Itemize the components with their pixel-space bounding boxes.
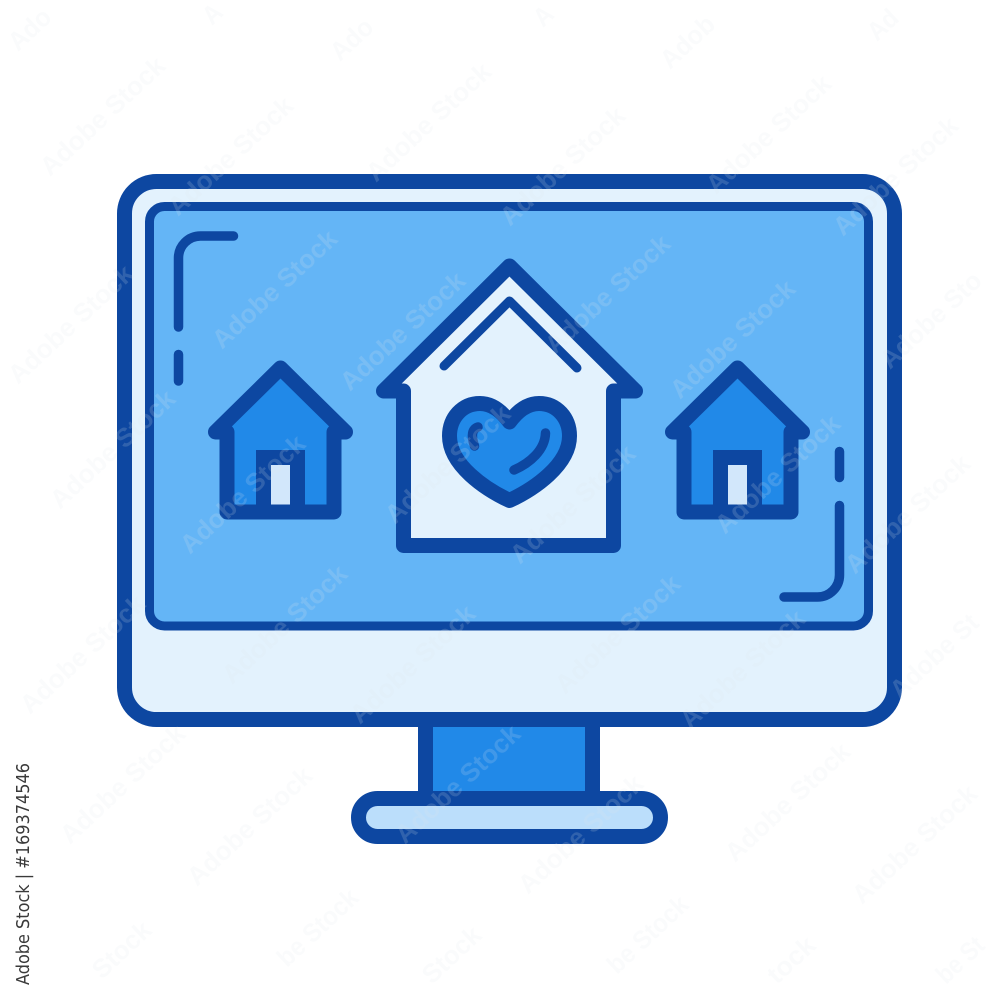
watermark: faint diagonal stock marks: Ad: [861, 3, 904, 46]
watermark: faint diagonal stock marks: Adobe Stock: [54, 718, 191, 849]
watermark: stock id: Adobe Stock | #169374546: [13, 763, 34, 985]
icon: left house: [216, 368, 346, 512]
icon: monitor stand base: [358, 798, 660, 836]
watermark: faint diagonal stock marks: Adobe Stock: [360, 56, 497, 187]
watermark: faint diagonal stock marks: Adobe Stock: [512, 768, 649, 899]
watermark: faint diagonal stock marks: Adobe Stock: [334, 265, 471, 396]
icon: monitor body: [124, 182, 894, 720]
watermark: faint diagonal stock marks: Adobe St: [884, 607, 985, 704]
watermark: faint diagonal stock marks: Stock: [86, 914, 158, 984]
watermark: faint diagonal stock marks: Adobe Stock: [539, 228, 676, 359]
watermark: faint diagonal stock marks: be St: [930, 930, 991, 989]
watermark: faint diagonal stock marks: Adobe Stock: [674, 603, 811, 734]
icon: monitor stand neck: [426, 715, 592, 800]
watermark: faint diagonal stock marks: be Stock: [601, 889, 695, 979]
watermark: faint diagonal stock marks: Ado: [324, 12, 379, 66]
watermark: faint diagonal stock marks: Adobe Stock: [14, 588, 151, 719]
watermark: faint diagonal stock marks: Adobe Stock: [34, 50, 171, 181]
watermark: faint diagonal stock marks: Adobe Stock: [827, 110, 964, 241]
watermark: faint diagonal stock marks: Adobe Stock: [846, 778, 983, 909]
watermark: faint diagonal stock marks: Adobe Stock: [206, 223, 343, 354]
watermark: faint diagonal stock marks: Adobe Stock: [344, 598, 481, 729]
watermark: faint diagonal stock marks: Stock: [416, 919, 488, 989]
watermark: faint diagonal stock marks: Adobe Stock: [174, 428, 311, 559]
watermark: faint diagonal stock marks: Adobe Stock: [44, 383, 181, 514]
watermark: faint diagonal stock marks: tock: [761, 930, 822, 989]
watermark: faint diagonal stock marks: Adobe Stock: [719, 736, 856, 867]
watermark: faint diagonal stock marks: Adobe Stock: [709, 408, 846, 539]
icon: screen glare top left: [178, 236, 234, 381]
watermark: faint diagonal stock marks: Adobe Stock: [389, 718, 526, 849]
panel: monitor screen: [150, 206, 868, 626]
icon: screen glare bottom right: [784, 452, 840, 597]
watermark: faint diagonal stock marks: Adobe Stock: [549, 568, 686, 699]
watermark: faint diagonal stock marks: Adobe Stock: [216, 558, 353, 689]
watermark: faint diagonal stock marks: Adobe Stock: [664, 273, 801, 404]
icon: right house: [672, 368, 802, 512]
icon: center house: [384, 266, 636, 546]
watermark: faint diagonal stock marks: Adobe Stock: [504, 438, 641, 569]
watermark: faint diagonal stock marks: Adobe Stock: [494, 100, 631, 231]
watermark: faint diagonal stock marks: Adobe Stock: [379, 398, 516, 529]
watermark: faint diagonal stock marks: Adobe Stock: [839, 448, 976, 579]
watermark: faint diagonal stock marks: Ado: [2, 2, 57, 56]
watermark: faint diagonal stock marks: Adobe Stock: [181, 760, 318, 891]
icon: heart: [450, 404, 570, 500]
watermark: faint diagonal stock marks: Adobe Stock: [162, 90, 299, 221]
watermark: faint diagonal stock marks: Adobe Stock: [2, 258, 139, 389]
watermark: faint diagonal stock marks: Adobe Sto: [874, 265, 988, 374]
watermark: faint diagonal stock marks: Adobe Stock: [700, 68, 837, 199]
watermark: faint diagonal stock marks: be Stock: [271, 882, 365, 972]
watermark: faint diagonal stock marks: Adob: [654, 9, 721, 74]
